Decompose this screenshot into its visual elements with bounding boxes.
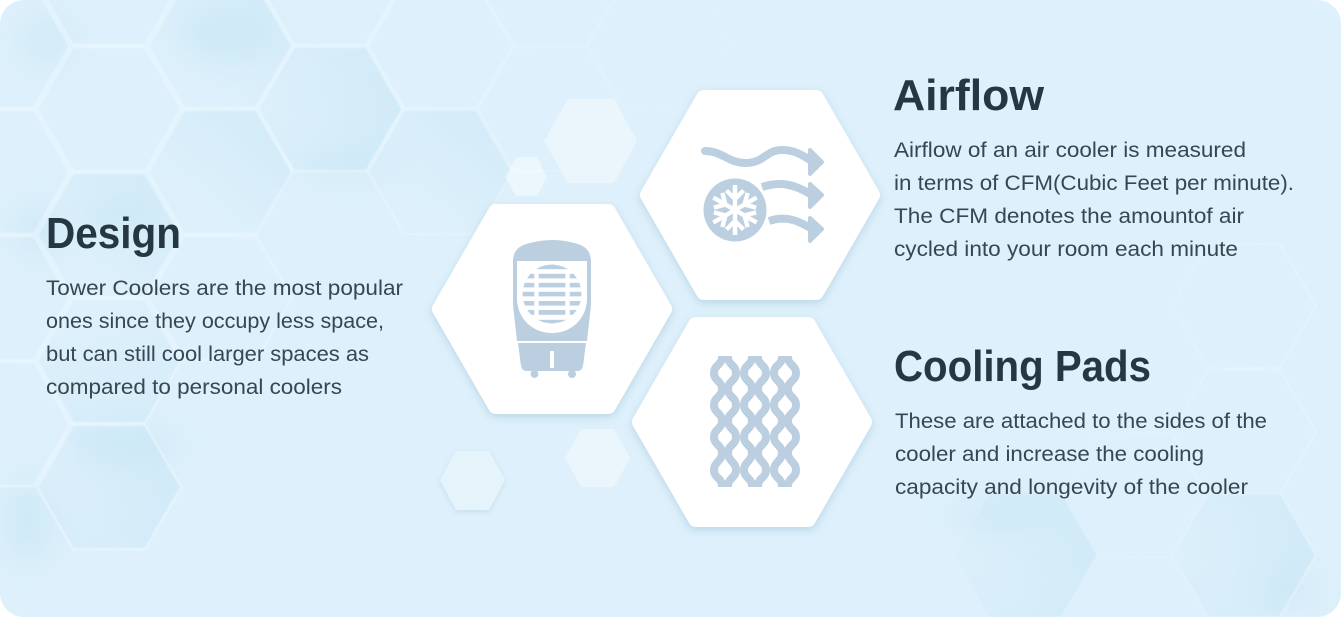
text block: design description: compared to personal coolers bbox=[46, 376, 342, 399]
text block: cooling pads description bbox=[895, 410, 1267, 499]
text block: airflow description: in terms of CFM(Cubic Feet per minute). bbox=[894, 172, 1294, 195]
heading: Airflow: Airflow bbox=[893, 71, 1045, 120]
text block: cooling pads description: capacity and longevity of the cooler bbox=[895, 476, 1248, 499]
hexagon: cooling pads bbox=[640, 325, 864, 519]
text block: design description: Tower Coolers are the most popular bbox=[46, 277, 403, 300]
heading: Cooling Pads: Cooling Pads bbox=[894, 342, 1151, 391]
text block: design description bbox=[46, 277, 403, 399]
small decorative hexagon, upper large bbox=[544, 99, 637, 183]
text block: cooling pads description: These are attached to the sides of the bbox=[895, 410, 1267, 433]
text block: design description: ones since they occupy less space, bbox=[46, 310, 384, 333]
small decorative hexagon, upper small bbox=[505, 157, 547, 196]
text block: cooling pads description: cooler and increase the cooling bbox=[895, 443, 1204, 466]
text block: airflow description: cycled into your room each minute bbox=[894, 238, 1238, 261]
small decorative hexagon, lower left bbox=[440, 451, 505, 510]
icon: airflow with snowflake bbox=[704, 150, 822, 242]
text block: airflow description: Airflow of an air cooler is measured bbox=[894, 139, 1246, 162]
heading: Design: Design bbox=[46, 209, 181, 258]
hexagon: design bbox=[440, 212, 664, 406]
hexagon: airflow bbox=[648, 98, 872, 292]
text block: design description: but can still cool larger spaces as bbox=[46, 343, 369, 366]
small decorative hexagon, lower right bbox=[565, 429, 630, 487]
text block: airflow description: The CFM denotes the amountof air bbox=[894, 205, 1244, 228]
icon: cooling pad lattice bbox=[714, 350, 796, 494]
icon: tower air cooler bbox=[513, 240, 591, 378]
text block: airflow description bbox=[894, 139, 1294, 261]
